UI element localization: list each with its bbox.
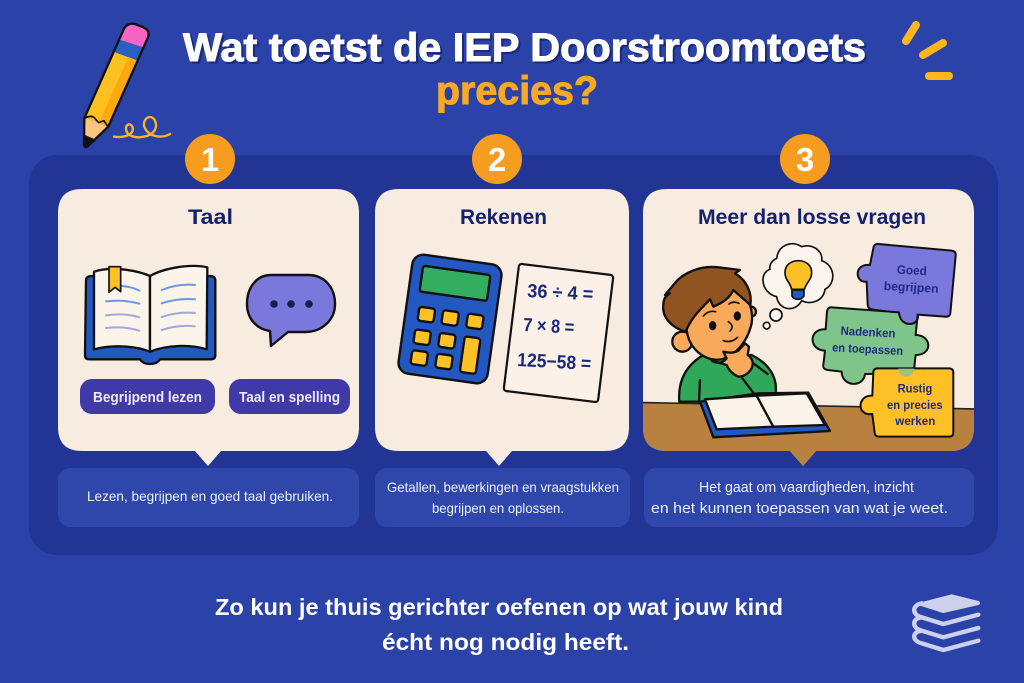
icon: sums sheet [504, 264, 613, 402]
puzzle piece: Rustig en precies werken: werken [894, 414, 935, 428]
panel: card Meer dan losse vragen [640, 189, 978, 470]
closing text [215, 594, 783, 655]
icon: pencil [84, 24, 170, 147]
number badge 2 [472, 134, 522, 184]
panel: main background [29, 155, 998, 555]
closing text: écht nog nodig heeft. [382, 629, 629, 655]
label: Taal en spelling [229, 379, 350, 414]
title: Wat toetst de IEP Doorstroomtoets [183, 26, 866, 70]
heading: Taal: Taal [188, 206, 233, 229]
number badge 2: 2 [488, 141, 506, 178]
number badge 3: 3 [796, 141, 814, 178]
panel: card Rekenen [375, 189, 629, 466]
text block: Rekenen description: begrijpen en oplossen. [432, 500, 564, 516]
label: Begrijpend lezen [80, 379, 215, 414]
text block: Taal description: Lezen, begrijpen en goed taal gebruiken. [87, 488, 333, 504]
heading: Rekenen: Rekenen [460, 206, 547, 229]
title [183, 26, 868, 113]
puzzle piece: Nadenken en toepassen [813, 307, 928, 384]
text block: Rekenen description [375, 468, 630, 527]
icon: speech bubble [247, 275, 335, 346]
number badge 1 [185, 134, 235, 184]
text block: Rekenen description: Getallen, bewerkingen en vraagstukken [387, 479, 619, 495]
icon: open book [85, 266, 215, 364]
text block: vaardigheden description [644, 468, 974, 527]
number badge 3 [780, 134, 830, 184]
panel: card Taal [58, 189, 359, 466]
puzzle piece: Rustig en precies werken: Rustig [898, 382, 932, 396]
icon: sums sheet: 36 ÷ 4 = [527, 281, 594, 305]
icon: sums sheet: 7 × 8 = [523, 315, 575, 339]
puzzle piece: Nadenken en toepassen: en toepassen [832, 340, 903, 358]
icon: thought bubble with light bulb [763, 244, 833, 329]
number badge 1: 1 [201, 141, 219, 178]
puzzle piece: Rustig en precies werken: en precies [887, 398, 943, 412]
icon: sums sheet: 125−58 = [517, 350, 592, 375]
icon: thinking child [663, 267, 830, 437]
desk [640, 402, 978, 470]
text block: vaardigheden description: Het gaat om vaardigheden, inzicht [699, 480, 914, 496]
label: Taal en spelling: Taal en spelling [239, 390, 340, 406]
puzzle piece: Goed begrijpen: begrijpen [883, 279, 939, 296]
icon: spark lines [906, 25, 949, 76]
title: precies? [436, 69, 598, 113]
icon: calculator [397, 253, 503, 385]
puzzle piece: Goed begrijpen [858, 244, 956, 324]
puzzle piece: Nadenken en toepassen: Nadenken [840, 324, 896, 341]
heading: Meer dan losse vragen: Meer dan losse vragen [698, 206, 926, 229]
label: Begrijpend lezen: Begrijpend lezen [93, 390, 202, 406]
icon: stack of books [914, 595, 979, 650]
puzzle piece: Rustig en precies werken [861, 368, 953, 437]
text block: Taal description [58, 468, 359, 527]
text block: vaardigheden description: en het kunnen toepassen van wat je weet. [651, 500, 948, 517]
puzzle piece: Goed begrijpen: Goed [896, 263, 927, 278]
title: Wat toetst de IEP Doorstroomtoets [185, 28, 868, 72]
closing text: Zo kun je thuis gerichter oefenen op wat jouw kind [215, 594, 783, 620]
